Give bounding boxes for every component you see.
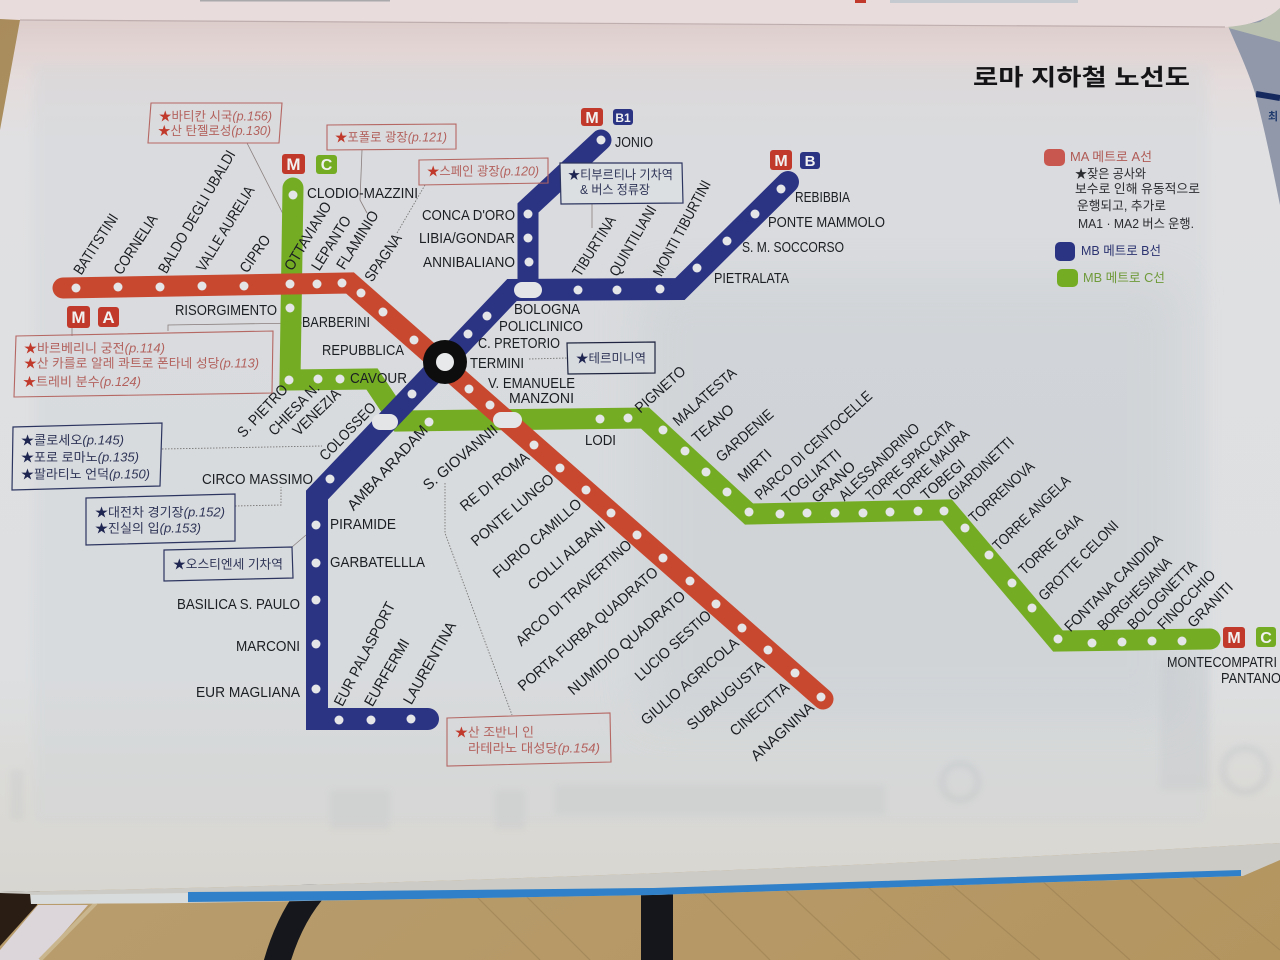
stations: line A — [72, 278, 826, 702]
callout: Barberini, Trevi: ★바르베리니 궁전 (p.114) — [24, 342, 165, 356]
diagonal station labels: VENEZIA — [289, 386, 344, 439]
diagonal station labels: BORGHESIANA — [1094, 554, 1175, 634]
horizontal station labels: CONCA D'ORO — [422, 207, 515, 224]
line badges: B1: B1 — [615, 111, 631, 125]
diagonal station labels: GARDENIE — [713, 406, 777, 466]
horizontal station labels: LIBIA/GONDAR — [419, 230, 515, 247]
diagonal station labels: CIPRO — [236, 232, 274, 276]
horizontal station labels: PIETRALATA — [714, 270, 789, 287]
legend: line C label: MB 메트로 C선 — [1083, 271, 1165, 285]
callout: Colosseo, Foro: ★팔라티노 언덕(p.150) — [21, 468, 150, 482]
diagonal station labels: TORRE ANGELA — [989, 472, 1074, 554]
callout: Colosseo, Foro — [12, 423, 162, 490]
callout: Barberini, Trevi: ★트레비 분수(p.124) — [23, 375, 141, 389]
diagonal station labels: EUR PALASPORT — [331, 599, 399, 709]
horizontal station labels: V. EMANUELE — [488, 375, 575, 392]
horizontal station labels: REPUBBLICA — [322, 342, 404, 359]
callout: Vatican: ★산 탄젤로성(p.130) — [158, 124, 271, 138]
horizontal station labels: C. PRETORIO — [478, 335, 560, 352]
diagonal station labels: GIARDINETTI — [944, 434, 1018, 505]
legend: line B swatch — [1055, 242, 1075, 261]
legend: line A swatch — [1044, 149, 1065, 166]
horizontal station labels: BARBERINI — [302, 314, 370, 331]
diagonal station labels: GIULIO AGRICOLA — [638, 635, 742, 729]
Termini hub — [423, 340, 467, 384]
line C green — [290, 188, 1210, 641]
callout: Spagna — [419, 158, 548, 185]
line badges: A — [67, 306, 119, 328]
diagonal station labels: FURIO CAMILLO — [490, 495, 585, 582]
line badges: C end: M — [1227, 630, 1241, 647]
callout: San Giovanni: 라테라노 대성당 (p.154) — [468, 742, 600, 756]
page tint — [33, 64, 1208, 824]
horizontal station labels: BASILICA S. PAULO — [177, 596, 300, 613]
callout: Popolo: ★포폴로 광장(p.121) — [335, 130, 447, 144]
callout: Tiburtina: & 버스 정류장 — [580, 183, 650, 197]
dark blue rule and heading on the page behind: 최 — [1268, 109, 1278, 123]
legend: line B label: MB 메트로 B선 — [1081, 244, 1161, 258]
interchange ovals — [372, 282, 542, 430]
diagonal station labels: PIGNETO — [632, 363, 689, 417]
diagonal station labels: TOGLIATTI — [779, 446, 845, 507]
diagonal station labels: OTTAVIANO — [281, 199, 335, 274]
diagonal station labels: GROTTE CELONI — [1035, 517, 1122, 604]
dark corner and paper below the book — [0, 890, 96, 960]
line badges: C end — [1223, 627, 1276, 648]
diagonal station labels: SUBAUGUSTA — [684, 657, 768, 734]
horizontal station labels: MARCONI — [236, 638, 300, 655]
line badges: C top — [282, 154, 337, 174]
callout: Tiburtina — [560, 163, 683, 204]
diagonal station labels — [70, 148, 1237, 765]
dark blue rule and heading on the page behind — [1256, 94, 1280, 123]
diagonal station labels: LAURENTINA — [400, 619, 460, 707]
callout: Ostiense — [164, 547, 293, 581]
diagonal station labels: SPAGNA — [361, 231, 406, 285]
diagonal station labels: S. GIOVANNII — [420, 422, 501, 494]
callout: San Giovanni — [447, 713, 611, 766]
diagonal station labels: CINECITTA — [727, 679, 793, 740]
legend: line A note: 운행되고, 추가로 — [1077, 198, 1166, 213]
diagonal station labels: AMBA ARADAM — [344, 422, 432, 514]
show-through ghost print — [10, 660, 1267, 830]
diagonal station labels: MONTI TIBURTINI — [650, 178, 715, 279]
line A red — [63, 283, 823, 699]
diagonal station labels: TIBURTINA — [569, 213, 620, 280]
grey book behind page, top right — [1220, 5, 1280, 260]
line B blue — [317, 182, 788, 719]
callout: Tiburtina: ★티부르티나 기차역 — [568, 168, 673, 182]
diagonal station labels: S. PIETRO — [234, 381, 292, 441]
diagonal station labels: TORRE GAIA — [1016, 511, 1086, 579]
diagonal station labels: TORRE MAURA — [891, 426, 973, 505]
callout: Vatican — [148, 103, 282, 143]
horizontal station labels: TERMINI — [470, 355, 524, 372]
callout: Spagna: ★스페인 광장(p.120) — [427, 164, 539, 178]
callout: Circo Massimo: ★진실의 입(p.153) — [95, 522, 201, 536]
diagonal station labels: FONTANA CANDIDA — [1061, 531, 1166, 635]
diagonal station labels: GRANITI — [1184, 579, 1237, 631]
upper page overlapping top — [0, 0, 1280, 27]
diagonal station labels: RE DI ROMA — [457, 449, 533, 515]
line badges: B1 — [581, 108, 633, 127]
diagonal station labels: TOBEGI — [918, 456, 969, 504]
callout: Termini — [567, 342, 655, 374]
blue edge strip — [188, 870, 1241, 902]
diagonal station labels: QUINTILIANI — [606, 203, 660, 280]
diagonal station labels: TORRENOVA — [966, 458, 1038, 527]
horizontal station labels: ANNIBALIANO — [423, 254, 515, 271]
horizontal station labels: JONIO — [615, 134, 653, 151]
legend — [1044, 149, 1200, 287]
callout: Barberini, Trevi — [14, 331, 273, 397]
diagonal station labels: BOLOGNETTA — [1124, 557, 1201, 633]
horizontal station labels: GARBATELLLA — [330, 554, 425, 571]
horizontal station labels: CAVOUR — [350, 370, 407, 387]
diagonal station labels: GRANO — [809, 458, 859, 507]
callout: Colosseo, Foro: ★콜로세오(p.145) — [21, 434, 124, 448]
diagonal station labels: PONTE LUNGO — [468, 471, 558, 550]
horizontal station labels: PIRAMIDE — [330, 516, 396, 533]
horizontal station labels: LODI — [585, 432, 616, 449]
diagonal station labels: FLAMINIO — [333, 208, 383, 273]
legend: line A note — [1075, 167, 1200, 231]
horizontal station labels: REBIBBIA — [795, 189, 850, 206]
white edge strip — [31, 893, 188, 904]
diagonal station labels: NUMIDIO QUADRATO — [565, 588, 689, 699]
horizontal station labels: CLODIO-MAZZINI — [307, 185, 418, 202]
horizontal station labels: CIRCO MASSIMO — [202, 471, 313, 488]
diagonal station labels: FINOCCHIO — [1154, 567, 1219, 633]
diagonal station labels: CHIESA N. — [265, 380, 323, 439]
diagonal station labels: PORTA FURBA QUADRATO — [515, 564, 662, 695]
diagonal station labels: CORNELIA — [110, 212, 162, 278]
line badges: C top: M — [286, 155, 301, 174]
diagonal station labels: TORRE SPACCATA — [863, 416, 958, 505]
leader lines — [72, 143, 592, 715]
diagonal station labels: PARCO DI CENTOCELLE — [752, 388, 876, 504]
horizontal station labels: PONTE MAMMOLO — [768, 214, 885, 231]
callout: Barberini, Trevi: ★산 카를로 알레 콰트로 폰타네 성당 (p.113) — [24, 356, 259, 370]
legend: line A note: 보수로 인해 유동적으로 — [1075, 182, 1200, 196]
diagonal station labels: LUCIO SESTIO — [632, 607, 715, 685]
callout: Circo Massimo: ★대전차 경기장 (p.152) — [95, 506, 225, 520]
horizontal station labels: BOLOGNA — [514, 301, 580, 318]
diagonal station labels: MALATESTA — [670, 365, 740, 430]
line badges: B — [770, 150, 820, 170]
diagonal station labels: COLLI ALBANI — [525, 517, 609, 594]
diagonal station labels: BATITSTINI — [70, 211, 122, 278]
diagonal station labels: TEANO — [689, 401, 738, 447]
diagonal station labels: VALLE AURELIA — [193, 183, 258, 275]
diagonal station labels: MIRTI — [735, 446, 775, 486]
callout: Termini: ★테르미니역 — [576, 352, 646, 366]
line B1 branch blue — [528, 140, 601, 290]
horizontal station labels: S. M. SOCCORSO — [742, 239, 844, 256]
line badges: C top: C — [321, 157, 333, 174]
diagonal station labels: ALESSANDRINO — [835, 420, 923, 505]
line badges: B: M — [774, 153, 788, 170]
callout: Vatican: ★바티칸 시국(p.156) — [159, 110, 272, 124]
legend: line C swatch — [1057, 269, 1078, 287]
line badges: A: A — [102, 308, 115, 327]
horizontal station labels: EUR MAGLIANA — [196, 684, 300, 701]
cables below the book — [276, 885, 673, 960]
callout: San Giovanni: ★산 조반니 인 — [455, 726, 534, 740]
callout: Colosseo, Foro: ★포로 로마노(p.135) — [21, 450, 139, 464]
line badges: C end: C — [1260, 630, 1272, 647]
horizontal station labels: POLICLINICO — [499, 318, 583, 335]
legend: line A note: ★잦은 공사와 — [1075, 167, 1146, 181]
page edge block — [0, 843, 1280, 904]
diagonal station labels: EURFERMI — [361, 636, 413, 710]
legend: line A label: MA 메트로 A선 — [1070, 150, 1152, 164]
line badges: A: M — [71, 308, 86, 327]
line badges: B: B — [805, 153, 816, 170]
callout: Circo Massimo — [86, 494, 235, 545]
stations: line B — [312, 136, 786, 724]
callout: Ostiense: ★오스티엔세 기차역 — [173, 558, 283, 572]
horizontal station labels: RISORGIMENTO — [175, 302, 277, 319]
diagonal station labels: LEPANTO — [308, 213, 355, 274]
diagonal station labels: BALDO DEGLI UBALDI — [155, 148, 239, 276]
diagonal station labels: ARCO DI TRAVERTINO — [513, 537, 635, 650]
horizontal station labels: MANZONI — [509, 390, 574, 407]
line badges: B1: M — [585, 110, 599, 127]
diagonal station labels: COLOSSEO — [316, 399, 380, 464]
callout: Popolo — [327, 124, 456, 150]
stations: line C — [284, 190, 1186, 648]
diagonal station labels: ANAGNINA — [748, 699, 818, 765]
horizontal station labels — [175, 134, 1280, 701]
legend: line A note: MA1 · MA2 버스 운행. — [1078, 216, 1194, 231]
title: 로마 지하철 노선도 — [973, 64, 1190, 90]
